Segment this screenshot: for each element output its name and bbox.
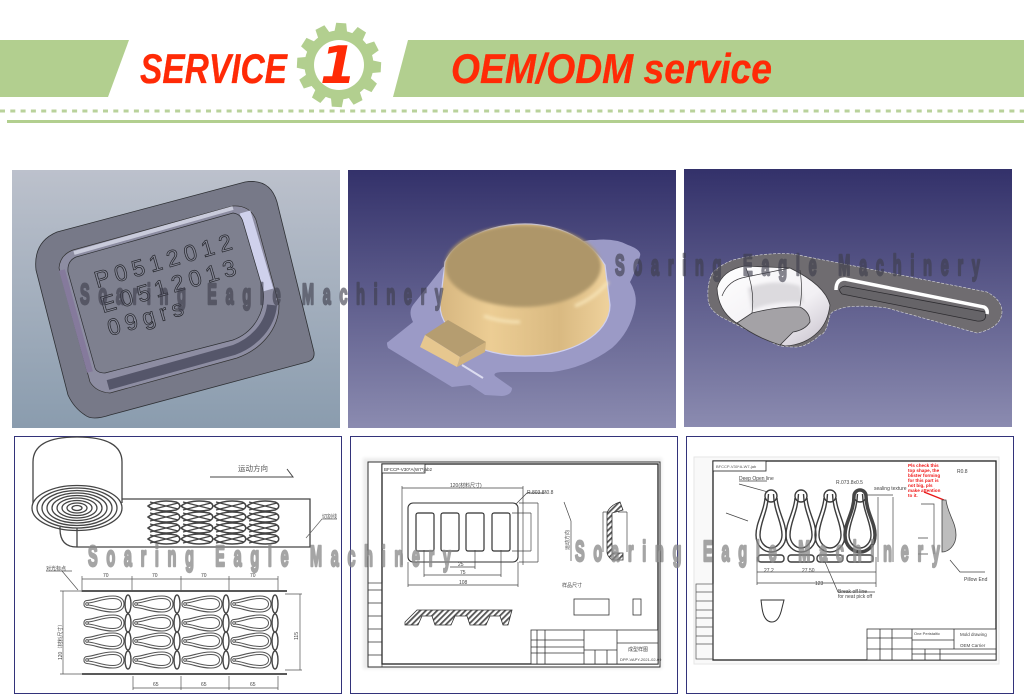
red review note: not big, pls bbox=[908, 483, 933, 488]
handle slot bbox=[840, 286, 986, 321]
panel background bbox=[684, 169, 1012, 427]
layout dimension labels: 115 bbox=[294, 632, 300, 640]
dimension labels: 27.2 bbox=[764, 568, 774, 574]
dimension labels: R0.8 bbox=[957, 469, 968, 475]
panel background bbox=[348, 170, 676, 428]
drawing sheet bbox=[694, 457, 999, 664]
blister outline bbox=[408, 503, 518, 562]
drawing sheet shadow bbox=[363, 458, 662, 669]
disc body bbox=[440, 224, 610, 356]
icon: gear with number 1 bbox=[297, 23, 381, 107]
four cavities bbox=[416, 513, 510, 551]
dimension labels: sealing texture bbox=[874, 486, 907, 492]
red pointer bbox=[924, 492, 944, 500]
dimension lines bbox=[402, 486, 627, 587]
red review note: to it. bbox=[908, 493, 918, 498]
title block: DPP-VAPY-2021-02-09 bbox=[620, 657, 662, 662]
layout dimension labels: 65 bbox=[201, 682, 207, 688]
disc highlights bbox=[484, 282, 608, 322]
drawing label box: BFCCP-V30*A(W7*jab2 bbox=[384, 467, 433, 472]
dimension labels: Pillow End bbox=[964, 577, 988, 583]
tab block bbox=[420, 320, 486, 367]
drawing label box bbox=[713, 461, 766, 471]
bowl lower facet bbox=[737, 307, 810, 345]
layout dimension labels: 70 bbox=[152, 573, 158, 579]
heading: SERVICE: SERVICE bbox=[140, 45, 289, 92]
layout dimension labels: 120（材料尺寸） bbox=[57, 622, 64, 660]
section view bbox=[405, 610, 512, 625]
dimension labels bbox=[739, 469, 988, 600]
red review note: top shape, the bbox=[908, 468, 940, 473]
left revision strip bbox=[368, 583, 382, 667]
strip cavities bbox=[148, 501, 279, 544]
dimension labels: 25 bbox=[458, 562, 464, 568]
layout dimension labels bbox=[46, 565, 300, 688]
dimension labels: R.803.8*0.8 bbox=[527, 490, 554, 496]
bowl shading bbox=[748, 282, 804, 310]
tray flange bbox=[36, 181, 314, 418]
heading: OEM/ODM service: OEM/ODM service bbox=[451, 45, 772, 92]
drawing label box bbox=[382, 464, 433, 473]
shaded cavity bbox=[845, 490, 875, 552]
header banner bbox=[0, 23, 1024, 123]
watermark: Soaring Eagle Machinery, first row right: Soaring Eagle Machinery bbox=[615, 248, 980, 281]
dimension labels: 120(材料尺寸) bbox=[450, 482, 482, 489]
layout rails and dimensions bbox=[46, 571, 302, 690]
watermark: Soaring Eagle Machinery, second row right: Soaring Eagle Machinery bbox=[575, 534, 940, 567]
embossed text bbox=[91, 229, 239, 341]
panel frame bbox=[350, 436, 678, 694]
dimension labels: 75 bbox=[460, 570, 466, 576]
dimension labels: Break off line bbox=[838, 589, 867, 595]
direction label: 运动方向 bbox=[238, 463, 268, 473]
red review note: for this part is bbox=[908, 478, 939, 483]
bottle cavities bbox=[756, 490, 875, 562]
rim highlights bbox=[74, 208, 233, 253]
drawing contents bbox=[32, 437, 337, 690]
tray rim bbox=[59, 206, 279, 393]
sample outlines bbox=[574, 599, 641, 615]
dimension lines bbox=[726, 481, 985, 592]
red review note: Pls check this bbox=[908, 463, 939, 468]
material callout: 切割线 bbox=[322, 513, 337, 520]
end profile bbox=[761, 600, 784, 622]
tray floor bbox=[68, 213, 263, 373]
blister flange bbox=[387, 240, 640, 396]
watermark: Soaring Eagle Machinery, first row left: Soaring Eagle Machinery bbox=[80, 277, 443, 310]
dimension labels: 27.50 bbox=[802, 568, 815, 574]
spoon flange bbox=[708, 254, 1002, 347]
layout teardrops bbox=[84, 595, 278, 669]
solid divider bbox=[7, 120, 1024, 123]
red review note: blister forming bbox=[908, 473, 940, 478]
dashed divider bbox=[0, 110, 1024, 112]
red review note: make attention bbox=[908, 488, 941, 493]
bowl contour lines bbox=[722, 268, 802, 313]
layout dimension labels: 对光标点 bbox=[46, 565, 66, 572]
right green band bbox=[393, 40, 1024, 97]
layout dimension labels: 70 bbox=[103, 573, 109, 579]
watermark: Soaring Eagle Machinery, second row left: Soaring Eagle Machinery bbox=[88, 539, 451, 572]
side section view bbox=[607, 502, 623, 560]
material roll bbox=[32, 437, 310, 547]
slot highlight bbox=[836, 279, 987, 314]
embossed text: E0512013 bbox=[97, 254, 239, 318]
panel: spoon blister CAD model bbox=[684, 169, 1012, 427]
panel: bottle blister drawing bbox=[686, 436, 1014, 694]
dimension labels: 123 bbox=[815, 581, 824, 587]
disc top face bbox=[445, 225, 601, 307]
panel: tray CAD model bbox=[12, 170, 340, 428]
panel frame bbox=[14, 436, 342, 694]
direction arrow bbox=[210, 469, 293, 477]
title block bbox=[867, 629, 996, 660]
embossed text: P0512012 bbox=[91, 229, 235, 293]
title block bbox=[531, 630, 662, 664]
layout dimension labels: 65 bbox=[153, 682, 159, 688]
dimension labels: 108 bbox=[459, 580, 468, 586]
embossed text: 09grs bbox=[104, 294, 186, 341]
panel: tray drawing bbox=[350, 436, 678, 694]
drawing sheet bbox=[368, 462, 662, 667]
dimension labels: 样品尺寸 bbox=[562, 582, 582, 589]
dimension labels: R.073.8x0.5 bbox=[836, 480, 863, 486]
tear-off slot bbox=[462, 365, 483, 378]
title block: Mold drawing bbox=[960, 632, 987, 637]
title block: One Peristaltic bbox=[914, 631, 940, 636]
left green band bbox=[0, 40, 129, 97]
title block: OEM Carrier bbox=[960, 643, 986, 648]
drawing label box: BFCCP-V30*A-W7-jab bbox=[716, 464, 757, 469]
spoon bowl bbox=[717, 266, 830, 346]
red review note bbox=[908, 463, 941, 498]
panel background bbox=[12, 170, 340, 428]
layout dimension labels: 70 bbox=[250, 573, 256, 579]
layout dimension labels: 70 bbox=[201, 573, 207, 579]
panel frame bbox=[686, 436, 1014, 694]
panel: strip layout drawing bbox=[14, 436, 342, 694]
left revision strip bbox=[696, 584, 713, 659]
side profile bbox=[942, 500, 956, 552]
dimension labels: Deep Open line bbox=[739, 476, 774, 482]
title block: 成型样图 bbox=[628, 646, 648, 653]
dimension labels bbox=[450, 482, 582, 589]
panel: round blister CAD model bbox=[348, 170, 676, 428]
dimension labels: 运动方向 bbox=[564, 530, 571, 550]
layout dimension labels: 65 bbox=[250, 682, 256, 688]
dimension labels: for neat pick off bbox=[838, 594, 873, 600]
material callout bbox=[306, 513, 337, 538]
icon: gear with number 1: 1 bbox=[320, 36, 356, 96]
